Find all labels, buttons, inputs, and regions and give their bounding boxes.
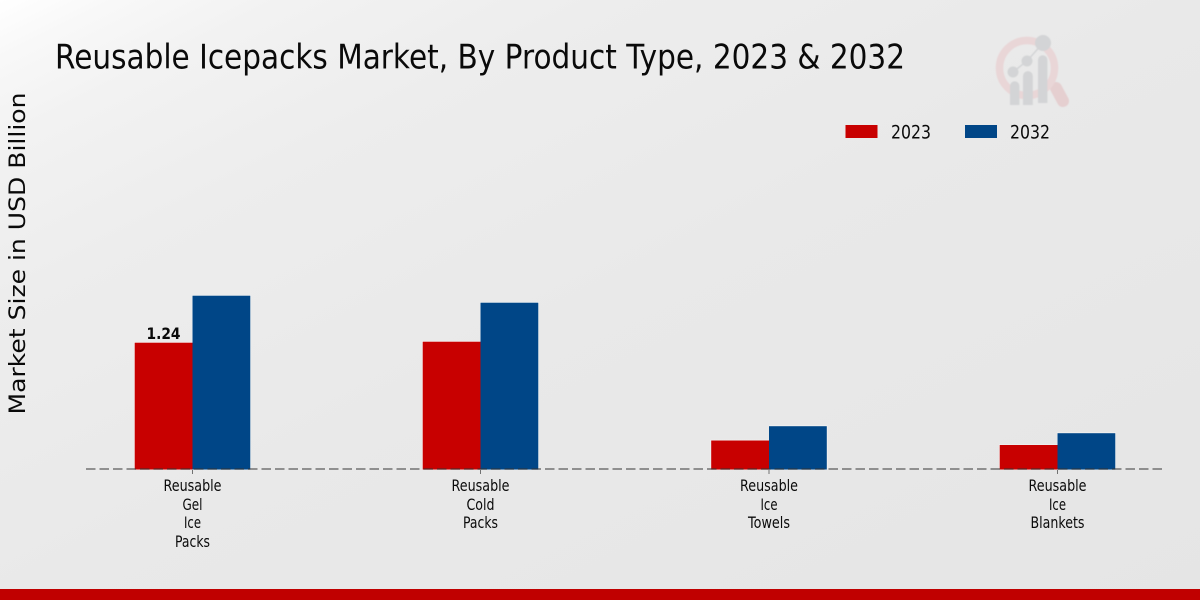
category label: Reusable Gel Ice Packs: Packs bbox=[175, 532, 210, 551]
category label: Reusable Gel Ice Packs bbox=[164, 476, 222, 551]
y axis label: Market Size in USD Billion bbox=[5, 92, 31, 414]
legend item: 2032: 2032 bbox=[1010, 122, 1050, 144]
value label: 1.24 bbox=[146, 324, 180, 343]
footer bar bbox=[0, 589, 1200, 600]
legend item: 2023 bbox=[846, 122, 931, 144]
category label: Reusable Ice Blankets: Reusable bbox=[1028, 476, 1086, 495]
category label: Reusable Ice Blankets bbox=[1028, 476, 1086, 532]
title: Reusable Icepacks Market, By Product Type, 2023 & 2032 bbox=[55, 38, 905, 76]
legend bbox=[846, 122, 1050, 144]
icon: watermark logo bbox=[1000, 35, 1063, 105]
category label: Reusable Gel Ice Packs: Ice bbox=[184, 513, 201, 532]
category label: Reusable Cold Packs: Packs bbox=[463, 513, 498, 532]
category label: Reusable Gel Ice Packs: Reusable bbox=[164, 476, 222, 495]
x axis baseline bbox=[86, 469, 1164, 474]
category label: Reusable Cold Packs bbox=[452, 476, 510, 532]
category label: Reusable Cold Packs: Reusable bbox=[452, 476, 510, 495]
legend item: 2023: 2023 bbox=[891, 122, 931, 144]
category label: Reusable Ice Towels bbox=[740, 476, 798, 532]
group: Reusable Ice Towels bbox=[710, 426, 828, 470]
category label: Reusable Gel Ice Packs: Gel bbox=[182, 495, 202, 514]
legend item: 2032 bbox=[965, 122, 1050, 144]
category label: Reusable Ice Towels: Ice bbox=[760, 495, 778, 514]
category label: Reusable Ice Towels: Towels bbox=[747, 513, 790, 532]
category label: Reusable Cold Packs: Cold bbox=[466, 495, 494, 514]
category label: Reusable Ice Towels: Reusable bbox=[740, 476, 798, 495]
group: Reusable Cold Packs bbox=[422, 302, 539, 470]
bar chart bbox=[134, 295, 1116, 470]
group: Reusable Ice Blankets bbox=[999, 432, 1116, 470]
group: Reusable Gel Ice Packs bbox=[134, 295, 251, 470]
category label: Reusable Ice Blankets: Ice bbox=[1049, 495, 1066, 514]
category label: Reusable Ice Blankets: Blankets bbox=[1030, 513, 1084, 532]
